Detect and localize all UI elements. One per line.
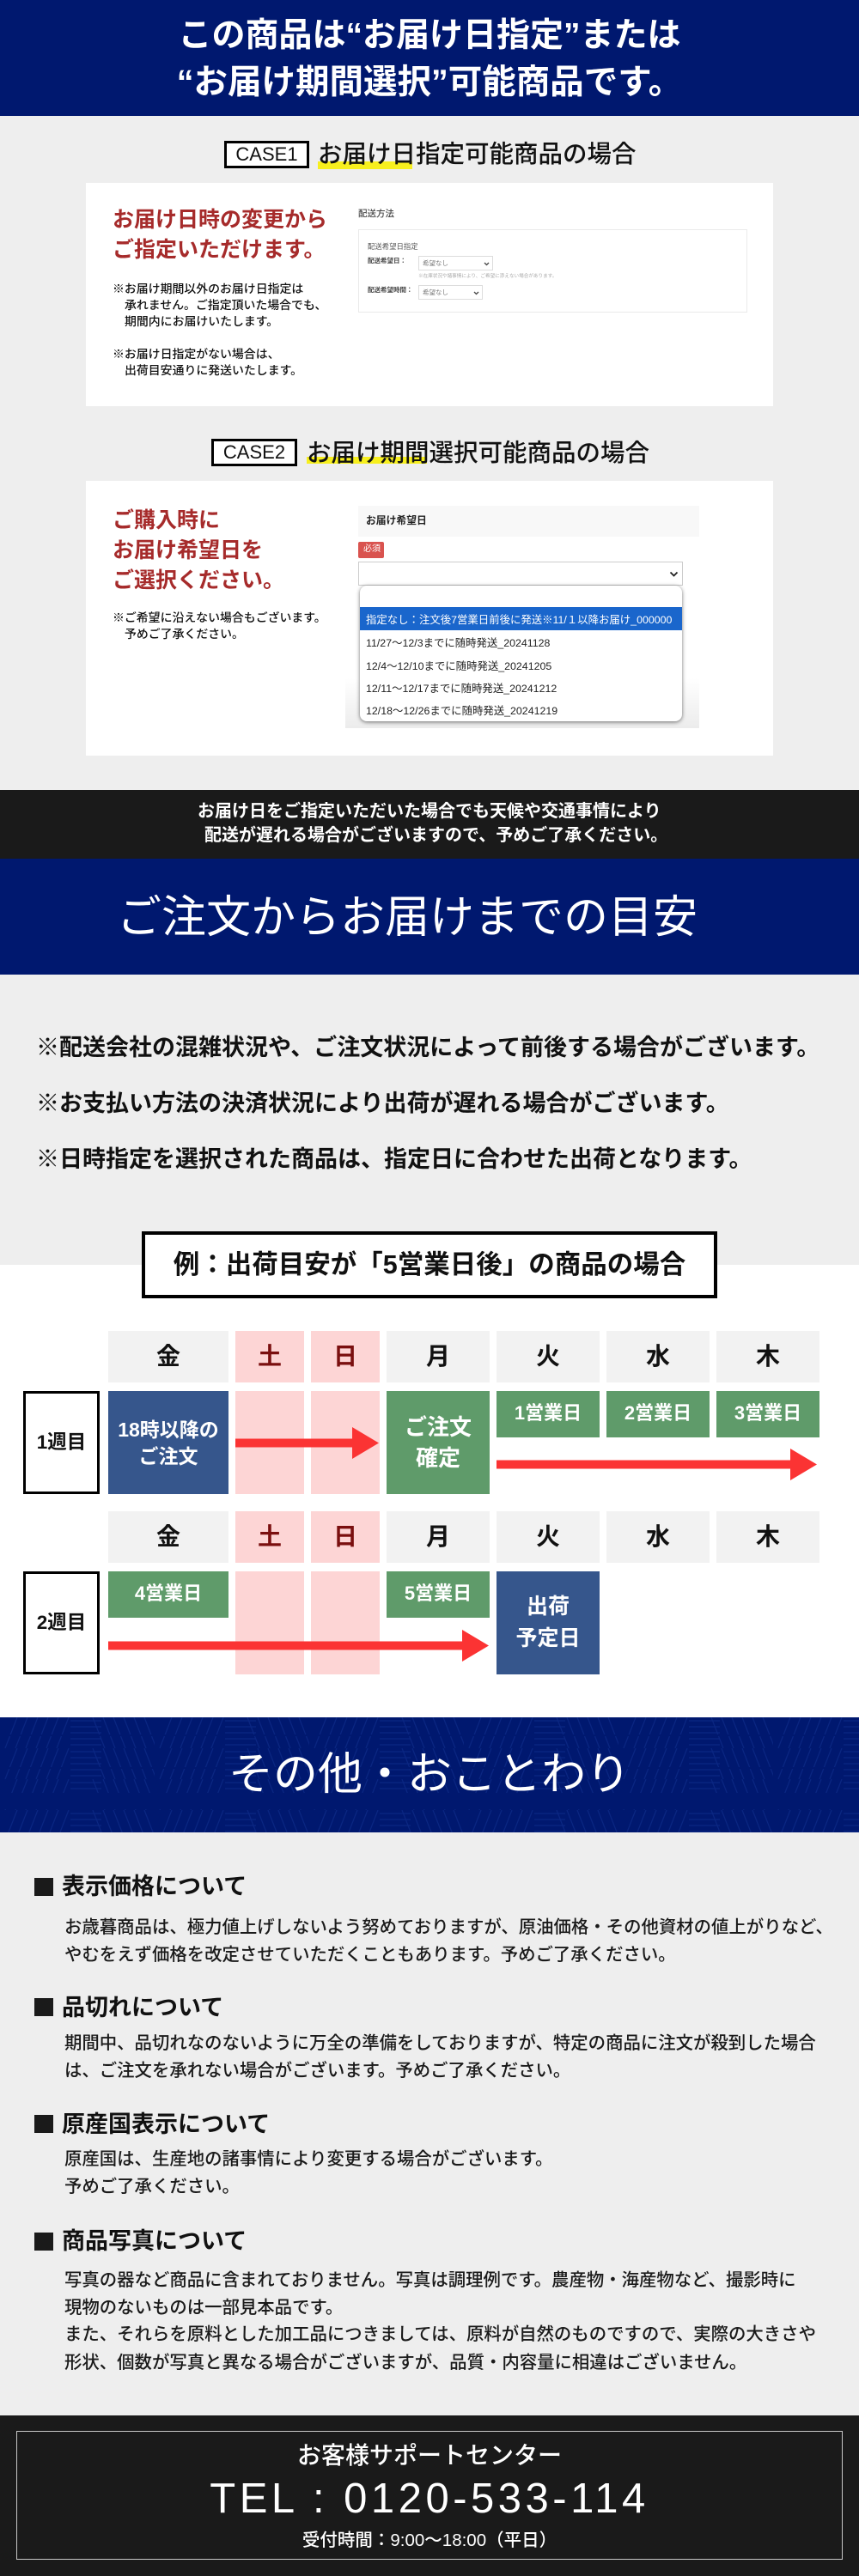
bullet: [34, 1998, 53, 2016]
time select: [418, 285, 483, 300]
note 2: ※お支払い方法の決済状況により出荷が遅れる場合がございます。: [36, 1091, 729, 1116]
week 2 day headers: 木: [756, 1523, 780, 1550]
week 2 day headers: 金: [156, 1523, 180, 1550]
body line 3: また、それらを原料とした加工品につきましては、原料が自然のものですので、実際の大きさや: [64, 2325, 816, 2344]
note: no delivery date: [113, 347, 302, 377]
CASE2 badge: CASE2: [223, 441, 285, 463]
order confirmed: [387, 1391, 490, 1494]
example title box: 例：出荷目安が「5営業日後」の商品の場合: [174, 1250, 685, 1279]
business day 4: 4営業日: [135, 1583, 202, 1604]
week 1 day headers: [108, 1331, 819, 1382]
body line 4: 形状、個数が写真と異なる場合がございますが、品質・内容量に相違はございません。: [64, 2354, 746, 2372]
time label: 配送希望時間：: [368, 286, 412, 294]
week 1 label: [23, 1391, 100, 1494]
body line 1: 写真の器など商品に含まれておりません。写真は調理例です。農産物・海産物など、撮影時に: [64, 2271, 796, 2290]
section heading text: その他・おことわり: [228, 1750, 631, 1800]
section background: cases: [0, 116, 859, 790]
note: may not meet request: [113, 611, 326, 641]
required badge: 必須: [363, 544, 381, 554]
date select: [418, 256, 493, 270]
shipping method label: 配送方法: [358, 209, 394, 219]
form title: 配送希望日指定: [368, 242, 418, 251]
date label: 配送希望日：: [368, 257, 406, 264]
notice line 2: 配送が遅れる場合がございますので、予めご了承ください。: [204, 826, 667, 845]
option 1: 11/27～12/3までに随時発送_20241128: [366, 637, 550, 649]
case 1 heading: [224, 141, 637, 169]
selected option: [360, 607, 682, 630]
top header band: [0, 0, 859, 116]
week 2 day headers: 火: [536, 1523, 560, 1550]
body line 1: 原産国は、生産地の諸事情により変更する場合がございます。: [64, 2150, 553, 2169]
body line 2: やむをえず価格を改定させていただくこともあります。予めご了承ください。: [64, 1946, 676, 1965]
section heading text: ご注文からお届けまでの目安: [117, 893, 698, 943]
note: delivery date outside period: ※お届け期間以外のお届け日指定は: [113, 282, 303, 295]
time select: 希望なし: [423, 289, 448, 296]
business day 4: [108, 1571, 228, 1618]
week 1 day headers: 日: [333, 1343, 357, 1370]
heading: 原産国表示について: [62, 2111, 270, 2137]
order after 18:00: 18時以降の: [118, 1419, 219, 1441]
section background: notes: [0, 975, 859, 1265]
example title box: [142, 1231, 717, 1298]
red heading case 1: お届け日時の変更から: [113, 208, 327, 232]
heading: 商品写真について: [62, 2228, 247, 2254]
note: delivery date outside period: 承れません。ご指定頂いた場合でも、: [125, 298, 326, 312]
week 1 label: 1週目: [37, 1431, 86, 1453]
week 1 day headers: 水: [646, 1343, 670, 1370]
order confirmed: ご注文: [405, 1414, 472, 1440]
reception hours: 受付時間：9:00～18:00（平日）: [302, 2530, 557, 2550]
order confirmed: 確定: [416, 1445, 460, 1471]
body line 2: 予めご了承ください。: [64, 2178, 240, 2196]
week 2 day headers: 月: [426, 1523, 450, 1550]
header line 2: “お届け期間選択”可能商品です。: [177, 64, 682, 101]
business day 5: [387, 1571, 490, 1618]
arrow: weekend: [235, 1427, 379, 1459]
case 2 title: お届け期間選択可能商品の場合: [307, 440, 649, 467]
footer: customer support: [0, 2415, 859, 2576]
note: delivery date outside period: [113, 282, 326, 328]
red heading case 1: ご指定いただけます。: [113, 238, 326, 262]
red heading case 2: ご選択ください。: [113, 568, 284, 592]
shipping date: [497, 1571, 600, 1674]
shipping date: 予定日: [515, 1626, 581, 1650]
business day 2: 2営業日: [624, 1402, 691, 1424]
option 4: 12/18～12/26までに随時発送_20241219: [366, 705, 557, 717]
yellow highlight: [307, 457, 427, 464]
heading: 品切れについて: [62, 1995, 223, 2020]
form header: delivery date: [358, 506, 699, 537]
note: may not meet request: ※ご希望に沿えない場合もございます。: [113, 611, 326, 624]
week 1 day headers: 木: [756, 1343, 780, 1370]
phone number: TEL : 0120-533-114: [210, 2476, 649, 2522]
red heading case 2: [113, 508, 284, 592]
sunday column week 1: [311, 1391, 380, 1494]
case 2 heading: [211, 439, 649, 467]
date select: 希望なし: [423, 259, 448, 267]
business day 1: 1営業日: [515, 1402, 582, 1424]
dropdown list: [360, 586, 682, 721]
order after 18:00: ご注文: [139, 1445, 198, 1467]
business day 3: 3営業日: [734, 1402, 801, 1424]
option: unspecified: 指定なし：注文後7営業日前後に発送※11/１以降お届け_000000: [366, 614, 672, 626]
block: product photos: [34, 2228, 816, 2372]
form header: delivery date: お届け希望日: [366, 514, 427, 526]
body line 1: お歳暮商品は、極力値上げしないよう努めておりますが、原油価格・その他資材の値上がりなど、: [64, 1918, 833, 1937]
week 2 label: [23, 1571, 100, 1674]
notice line 1: お届け日をご指定いただいた場合でも天候や交通事情により: [198, 802, 661, 821]
CASE2 badge: [211, 439, 297, 466]
business day 2: [606, 1391, 710, 1437]
option 2: 12/4～12/10までに随時発送_20241205: [366, 660, 551, 672]
body line 2: は、ご注文を承れない場合がございます。予めご了承ください。: [64, 2062, 570, 2081]
note 3: ※日時指定を選択された商品は、指定日に合わせた出荷となります。: [36, 1146, 752, 1172]
black notice band: [0, 790, 859, 859]
week 2 label: 2週目: [37, 1612, 86, 1633]
saturday column week 2: [235, 1571, 304, 1674]
block: out of stock: [34, 1995, 816, 2081]
section heading band: others: [0, 1717, 859, 1832]
header line 1: この商品は“お届け日指定”または: [178, 17, 680, 54]
bullet: [34, 2233, 53, 2251]
band pattern: [5, 1717, 859, 1832]
week 1 day headers: 土: [258, 1343, 282, 1370]
red heading case 1: [113, 208, 327, 262]
note: no delivery date: ※お届け日指定がない場合は、: [113, 347, 279, 361]
yellow highlight: [318, 161, 412, 169]
note 1: ※配送会社の混雑状況や、ご注文状況によって前後する場合がございます。: [36, 1035, 819, 1060]
block: price display: [34, 1874, 833, 1965]
bullet: [34, 1878, 53, 1896]
business day 1: [497, 1391, 600, 1437]
select field: [358, 562, 683, 586]
red heading case 2: お届け希望日を: [113, 538, 263, 562]
support center title: お客様サポートセンター: [297, 2442, 562, 2469]
section background: details: [0, 1832, 859, 2415]
order after 18:00: [108, 1391, 228, 1494]
note: delivery date outside period: 期間内にお届けいたします。: [125, 314, 278, 328]
footer frame: [16, 2431, 843, 2560]
week 2 day headers: [108, 1511, 819, 1563]
required badge: [358, 542, 384, 558]
heading: 表示価格について: [62, 1874, 247, 1899]
note: may not meet request: 予めご了承ください。: [125, 627, 244, 641]
shipping date: 出荷: [527, 1595, 570, 1619]
date hint: ※在庫状況や諸事情により、ご希望に添えない場合があります。: [418, 274, 557, 279]
section heading band: delivery guide: [0, 859, 859, 975]
saturday column week 1: [235, 1391, 304, 1494]
business day 5: 5営業日: [405, 1583, 472, 1604]
week 1 day headers: 金: [156, 1343, 180, 1370]
body line 2: 現物のないものは一部見本品です。: [64, 2299, 343, 2318]
business day 3: [716, 1391, 819, 1437]
red heading case 2: ご購入時に: [113, 508, 220, 532]
panel: case 1: [86, 183, 773, 406]
block: country of origin: [34, 2111, 553, 2196]
body line 1: 期間中、品切れなのないように万全の準備をしておりますが、特定の商品に注文が殺到した場合: [64, 2034, 816, 2053]
shipping form box: [358, 229, 747, 313]
dropdown backdrop: [345, 586, 699, 728]
CASE1 badge: [224, 141, 309, 168]
week 2 day headers: 土: [258, 1523, 282, 1550]
arrow: business days: [497, 1449, 817, 1480]
CASE1 badge: CASE1: [235, 143, 298, 165]
option 3: 12/11～12/17までに随時発送_20241212: [366, 683, 557, 695]
bullet: [34, 2115, 53, 2133]
week 1 day headers: 火: [536, 1343, 560, 1370]
arrow: week 2: [108, 1630, 489, 1662]
sunday column week 2: [311, 1571, 380, 1674]
week 1 day headers: 月: [426, 1343, 450, 1370]
week 2 day headers: 水: [646, 1523, 670, 1550]
note: no delivery date: 出荷目安通りに発送いたします。: [125, 363, 302, 377]
case 1 title: お届け日指定可能商品の場合: [318, 141, 637, 168]
calendar: [23, 1331, 819, 1674]
panel: case 2: [86, 481, 773, 756]
week 2 day headers: 日: [333, 1523, 357, 1550]
